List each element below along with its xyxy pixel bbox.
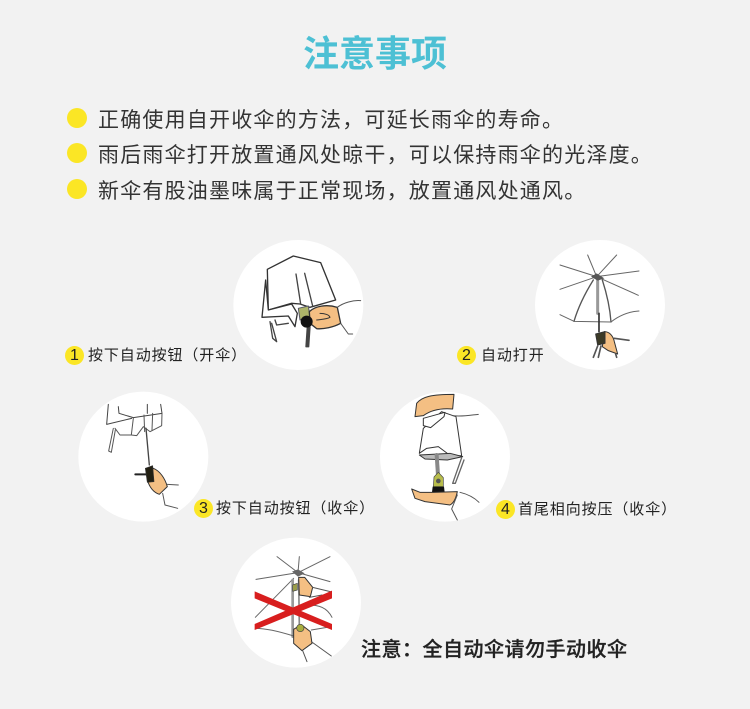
illustration 1: press button to open — [233, 240, 363, 370]
number badge 2: 2 — [462, 347, 471, 364]
number badge 4: 4 — [501, 501, 510, 518]
step 4 label: 首尾相向按压（收伞） — [518, 501, 677, 518]
illustration 3: press button to close — [78, 392, 208, 522]
illustration 5: do not close by hand — [231, 538, 361, 668]
number badge 1 — [65, 346, 84, 365]
bullet 1: 正确使用自开收伞的方法，可延长雨伞的寿命。 — [98, 109, 564, 132]
bullet 3: 新伞有股油墨味属于正常现场，放置通风处通风。 — [98, 180, 586, 203]
step 3 label: 按下自动按钮（收伞） — [216, 500, 375, 517]
title: 注意事项 — [303, 33, 447, 74]
number badge 4 — [496, 500, 515, 519]
warning note: 注意：全自动伞请勿手动收伞 — [361, 639, 628, 661]
number badge 1: 1 — [70, 347, 79, 364]
number badge 3: 3 — [199, 500, 208, 517]
bullet list — [67, 108, 653, 203]
step 2 label — [457, 346, 545, 365]
step 1 label: 按下自动按钮（开伞） — [88, 347, 247, 364]
step 2 label: 自动打开 — [481, 347, 545, 364]
number badge 2 — [457, 346, 476, 365]
illustration 2: opens automatically — [535, 240, 665, 370]
illustration 4: press head and tail to close — [380, 392, 510, 522]
bullet 2: 雨后雨伞打开放置通风处晾干，可以保持雨伞的光泽度。 — [98, 144, 653, 167]
number badge 3 — [194, 499, 213, 518]
